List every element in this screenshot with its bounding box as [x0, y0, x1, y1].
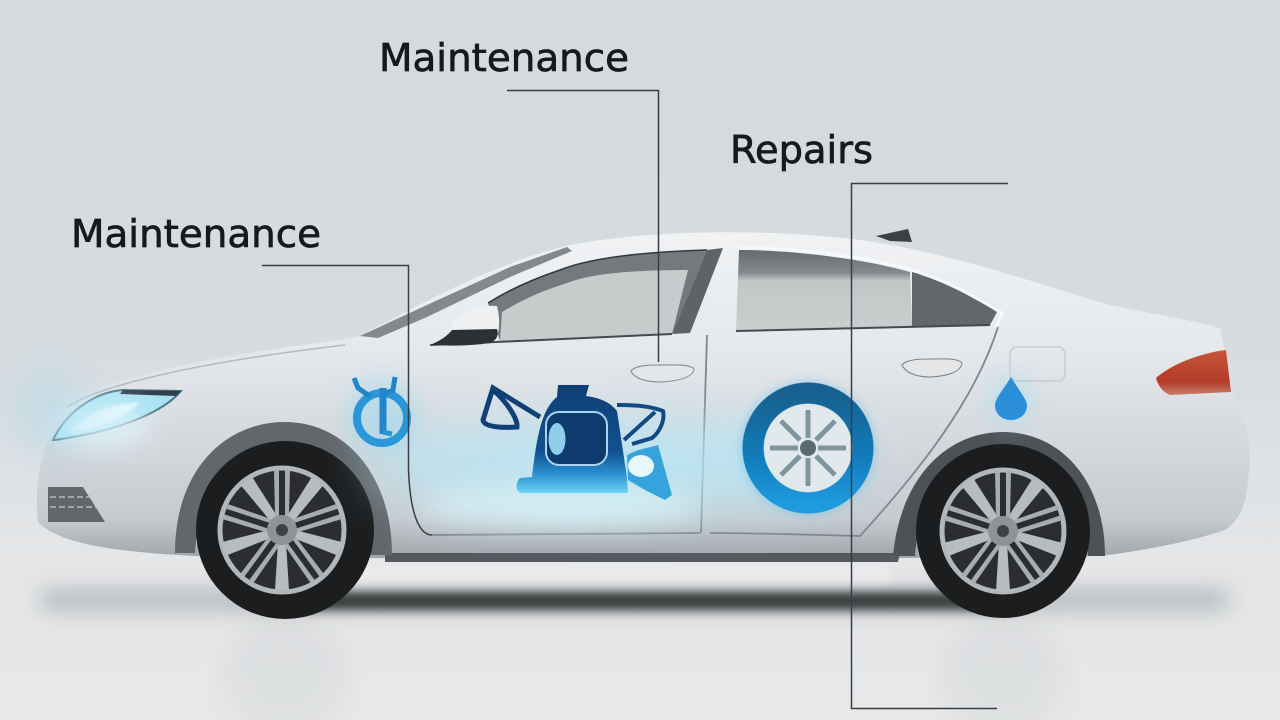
rear window	[736, 250, 912, 331]
front window	[488, 250, 707, 341]
grille lines	[50, 497, 97, 507]
headlight	[53, 390, 181, 440]
front window light pane	[500, 270, 688, 341]
leader line: left	[262, 266, 432, 535]
icon: water drop	[995, 377, 1027, 420]
fuel cap	[1010, 347, 1065, 381]
lower sill	[385, 553, 900, 562]
oil can stand	[627, 445, 672, 500]
car	[37, 229, 1250, 619]
rear wheel arch	[893, 432, 1105, 556]
rear wheel	[916, 444, 1090, 618]
wheel reflections	[223, 610, 1065, 720]
window top line	[488, 250, 707, 303]
hood crease	[67, 345, 345, 407]
rear quarter window	[912, 272, 997, 326]
door seams	[432, 327, 998, 536]
blue glow	[18, 372, 1036, 527]
leader line: right	[852, 184, 1008, 708]
oil can highlight	[548, 423, 566, 455]
oil can spout	[483, 388, 540, 427]
antenna	[876, 229, 912, 242]
heading: Maintenance top: Maintenance	[379, 36, 629, 81]
front wheel arch	[175, 422, 392, 555]
door handle front	[631, 365, 694, 382]
tail light	[1156, 350, 1231, 395]
icon: tire	[741, 381, 875, 515]
icon: oil can	[483, 385, 672, 500]
mirror	[430, 306, 499, 345]
window frame	[739, 248, 1002, 327]
belt line	[430, 325, 990, 345]
icon: wrench emblem	[354, 377, 407, 443]
oil can handle	[617, 405, 663, 444]
front grille	[48, 487, 105, 522]
door handle rear	[902, 359, 962, 377]
oil can window	[546, 412, 607, 465]
ground shadow	[40, 568, 1230, 610]
leader line: top	[507, 90, 658, 362]
heading: Repairs: Repairs	[730, 128, 873, 173]
heading: Maintenance left: Maintenance	[71, 212, 321, 257]
door pillar	[672, 248, 723, 334]
car body	[37, 232, 1250, 558]
windshield strip	[360, 247, 572, 338]
oil can body	[517, 385, 628, 493]
front wheel	[196, 441, 374, 619]
